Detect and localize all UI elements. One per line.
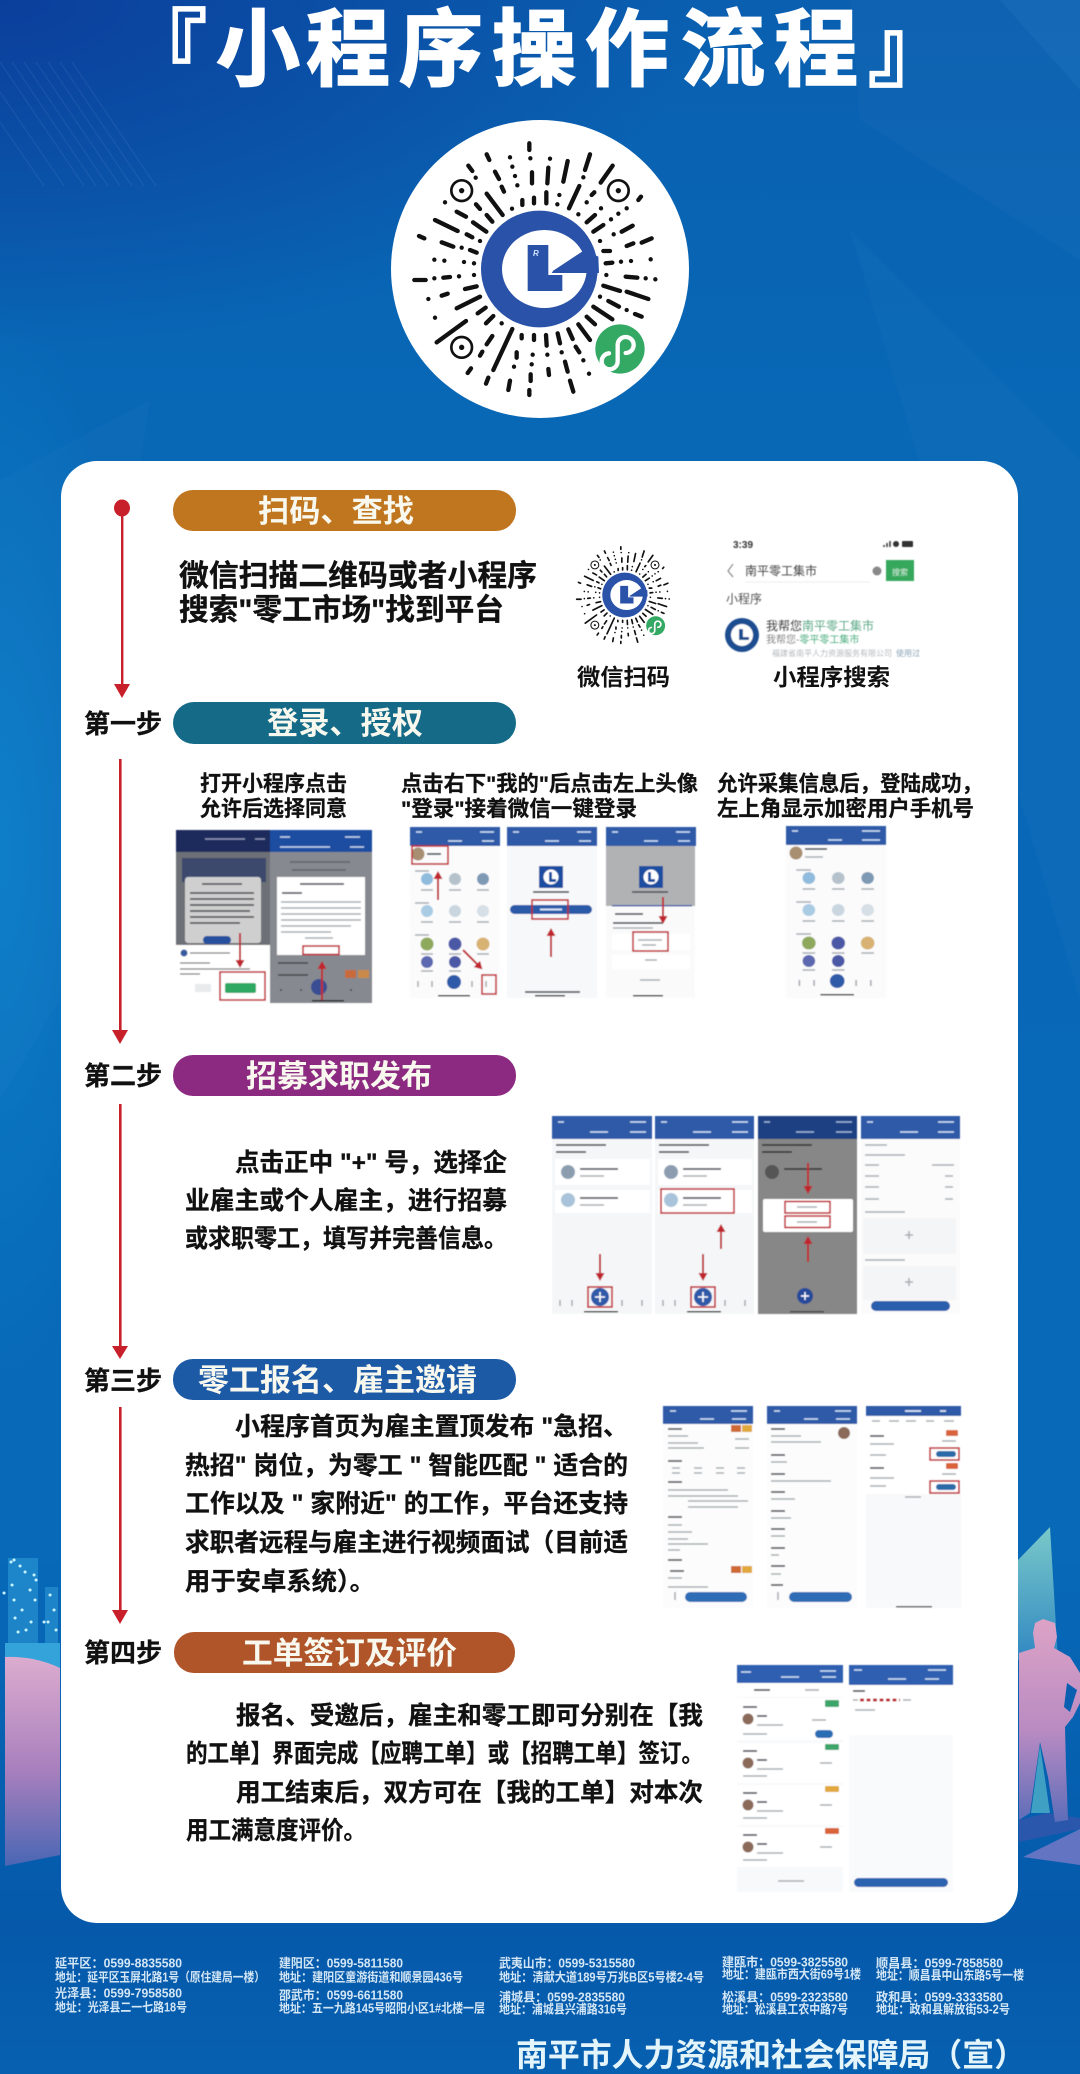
caption: tap my page: "登录"接着微信一键登录 — [401, 797, 637, 821]
caption: open mini program: 打开小程序点击 — [200, 772, 347, 796]
phone mock: mini program search: 我帮您南平零工集市 — [766, 618, 874, 633]
timeline: start dot and arrow — [114, 500, 130, 698]
footer: county contact directory: 地址：清献大道189号万兆B区5号楼2-4号 — [499, 1970, 704, 1984]
phone mock: mini program search: 南平零工集市 — [745, 563, 817, 578]
heading pill: worker signup and employer invite: 零工报名、雇主邀请 — [198, 1363, 477, 1398]
text: tap plus instructions: 业雇主或个人雇主，进行招募 — [185, 1187, 507, 1215]
screenshot: work order list — [737, 1665, 843, 1892]
screenshot: rating page — [849, 1665, 953, 1892]
footer: county contact directory: 武夷山市：0599-5315580 — [499, 1956, 635, 1970]
logo mark R: R — [533, 249, 539, 258]
phone mock: mini program search: 3:39 — [733, 540, 753, 551]
text: scan instruction: 搜索"零工市场"找到平台 — [179, 593, 504, 627]
screenshot: employer type dialog — [758, 1116, 857, 1314]
footer: county contact directory — [55, 1954, 1024, 2016]
footer: issuing bureau: 南平市人力资源和社会保障局（宣） — [516, 2037, 1026, 2073]
timeline arrow: step three — [112, 1407, 128, 1624]
footer: county contact directory: 地址：松溪县工农中路7号 — [722, 2002, 848, 2016]
footer: county contact directory: 政和县：0599-3333580 — [876, 1990, 1003, 2004]
screenshot: my page with avatar highlight — [410, 827, 500, 998]
phone mock: mini program search: 我帮您-零平零工集市 — [766, 633, 859, 646]
phone mock: mini program search: 使用过 — [896, 648, 920, 658]
heading pill: login and authorize: 登录、授权 — [267, 706, 423, 741]
footer: county contact directory: 地址：顺昌县中山东路5号一楼 — [876, 1968, 1024, 1982]
text: scan instruction: 微信扫描二维码或者小程序 — [179, 560, 537, 593]
heading pill: recruit and job posting: 招募求职发布 — [246, 1059, 432, 1094]
step label: step three: 第三步 — [84, 1366, 162, 1396]
heading pill: work order signing and rating — [174, 1632, 515, 1673]
caption: WeChat scan: 微信扫码 — [577, 664, 670, 690]
footer: county contact directory: 光泽县：0599-7958580 — [55, 1986, 182, 2000]
heading pill: login and authorize — [173, 702, 516, 744]
footer: county contact directory: 建阳区：0599-5811580 — [279, 1956, 403, 1970]
phone mock: mini program search — [725, 540, 920, 658]
screenshot: logged-in my page — [786, 826, 886, 998]
timeline arrow: step two — [112, 1104, 128, 1359]
decoration: person silhouette — [1018, 1527, 1080, 1865]
QR code: mini program — [391, 120, 689, 418]
heading pill: work order signing and rating: 工单签订及评价 — [242, 1636, 457, 1671]
text: work order instructions: 用工结束后，双方可在【我的工单】对本次 — [236, 1778, 703, 1807]
text: tap plus instructions: 或求职零工，填写并完善信息。 — [185, 1225, 507, 1253]
text: home page features: 热招" 岗位，为零工 " 智能匹配 " 适合的 — [185, 1451, 628, 1480]
footer: county contact directory: 顺昌县：0599-7858580 — [876, 1956, 1003, 1970]
step label: step one: 第一步 — [84, 709, 162, 739]
footer: county contact directory: 地址：五一九路145号昭阳小区1#北楼一层 — [279, 2000, 485, 2016]
footer: county contact directory: 延平区：0599-8835580 — [55, 1956, 182, 1970]
heading pill: recruit and job posting — [173, 1055, 516, 1096]
footer: county contact directory: 地址：建瓯市西大街69号1楼 — [722, 1966, 861, 1982]
heading pill: scan and search: 扫码、查找 — [258, 494, 414, 529]
caption: login success: 左上角显示加密用户手机号 — [717, 796, 974, 821]
screenshot: role list highlighted — [655, 1116, 754, 1314]
caption: tap my page: 点击右下"我的"后点击左上头像 — [401, 772, 698, 796]
screenshots: authorize dialogs — [176, 830, 372, 1003]
decoration: city skyline — [4, 1558, 60, 1866]
screenshot: job detail — [663, 1406, 753, 1608]
footer: county contact directory: 地址：浦城县兴浦路316号 — [499, 2002, 627, 2016]
footer: county contact directory: 浦城县：0599-2835580 — [499, 1990, 625, 2004]
caption: login success: 允许采集信息后，登陆成功， — [717, 771, 982, 796]
caption: open mini program: 允许后选择同意 — [200, 796, 347, 821]
text: home page features: 工作以及 " 家附近" 的工作，平台还支持 — [185, 1489, 628, 1518]
text: home page features: 小程序首页为雇主置顶发布 "急招、 — [235, 1413, 628, 1441]
phone mock: mini program search: 小程序 — [726, 591, 762, 606]
caption: mini program search: 小程序搜索 — [773, 664, 890, 690]
screenshot: role list with plus — [552, 1116, 652, 1314]
text: home page features: 求职者远程与雇主进行视频面试（目前适 — [185, 1529, 628, 1557]
text: work order instructions: 的工单】界面完成【应聘工单】或【招聘工单】签订。 — [186, 1739, 703, 1768]
QR thumbnail — [577, 547, 669, 643]
footer: county contact directory: 建瓯市：0599-3825580 — [722, 1954, 848, 1970]
footer: county contact directory: 地址：政和县解放街53-2号 — [876, 2002, 1010, 2016]
step label: step four: 第四步 — [84, 1638, 162, 1668]
white content panel — [61, 461, 1018, 1923]
screenshot: WeChat one-tap confirm — [606, 827, 696, 998]
title: 『小程序操作流程』 — [123, 3, 952, 97]
footer: county contact directory: 地址：延平区玉屏北路1号（原住建局一楼） — [55, 1970, 265, 1984]
screenshot: worker profile — [767, 1406, 857, 1608]
heading pill: worker signup and employer invite — [173, 1359, 516, 1400]
text: tap plus instructions: 点击正中 "+" 号，选择企 — [235, 1149, 507, 1177]
heading pill: scan and search — [173, 490, 516, 531]
footer: county contact directory: 松溪县：0599-2323580 — [722, 1990, 848, 2004]
screenshot: publish form — [861, 1116, 960, 1314]
footer: county contact directory: 地址：光泽县二一七路18号 — [55, 2000, 187, 2014]
text: work order instructions: 报名、受邀后，雇主和零工即可分别在【我 — [236, 1702, 703, 1730]
text: home page features: 用于安卓系统）。 — [185, 1568, 375, 1596]
phone mock: mini program search: 搜索 — [892, 567, 908, 577]
step label: step two: 第二步 — [84, 1061, 162, 1091]
timeline arrow: step one — [112, 759, 128, 1044]
footer: county contact directory: 邵武市：0599-6611580 — [279, 1988, 403, 2002]
phone mock: mini program search: 福建省南平人力资源服务有限公司 — [772, 648, 892, 658]
footer: county contact directory: 地址：建阳区童游街道和顺景园436号 — [279, 1970, 463, 1984]
screenshot: job invitation list — [866, 1406, 961, 1608]
text: work order instructions: 用工满意度评价。 — [186, 1816, 366, 1845]
screenshot: one-tap login — [507, 827, 597, 998]
